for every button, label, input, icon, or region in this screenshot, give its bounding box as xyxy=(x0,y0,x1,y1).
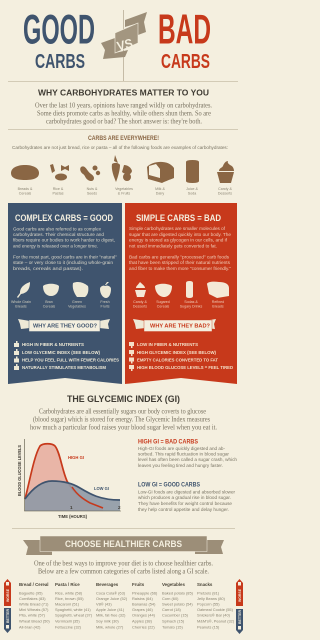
food icons row xyxy=(11,155,234,183)
icon: bowl xyxy=(43,284,59,296)
icon: candy cupcake xyxy=(135,282,146,297)
bad carbs bullets xyxy=(137,342,233,370)
complex carbs text: Good carbs are also referred to as complex xyxy=(13,226,102,232)
ribbon: why are they bad: WHY ARE THEY BAD? xyxy=(150,324,210,330)
table: snacks xyxy=(197,582,235,629)
table: fruits xyxy=(132,582,158,629)
panel: simple carbs xyxy=(125,203,237,384)
right scale: worse to better: WORSE xyxy=(238,588,242,602)
table: bread and cereal: Baguette (95) xyxy=(19,590,43,596)
title: good carbs: CARBS xyxy=(35,50,85,73)
glycemic index intro text: (blood sugar) which is stored for energy. The Glycemic Index measures xyxy=(33,416,210,424)
simple carbs text: energy is stored as glycogen in our cells, and if xyxy=(129,238,228,244)
table: bread and cereal: All-bran (42) xyxy=(19,624,41,629)
food icon labels: Juice & xyxy=(186,187,198,191)
heading: glycemic index: THE GLYCEMIC INDEX (GI) xyxy=(67,393,180,404)
title: bad carbs: CARBS xyxy=(161,50,210,73)
heading: carbs are everywhere: CARBS ARE EVERYWHERE! xyxy=(88,135,159,142)
simple carbs text: that have been stripped of their natural nutrients xyxy=(129,260,231,266)
x axis label: TIME (HOURS) xyxy=(58,514,87,519)
simple carbs text: sugar that are digested quickly into our body. The xyxy=(129,232,231,238)
table: beverages: Beverages xyxy=(96,582,119,587)
table: bread and cereal: Wheat Bread (50) xyxy=(19,618,50,623)
table: beverages: Apple Juice (41) xyxy=(96,607,125,612)
good food labels: Cereals xyxy=(43,304,55,308)
icons: thumbs down xyxy=(129,342,134,371)
icons: thumbs up xyxy=(14,341,19,370)
glycemic index intro text: Carbohydrates are all essentially sugars our body coverts to glucose xyxy=(39,408,206,416)
good carbs bullets: NATURALLY STIMULATES METABOLISM xyxy=(22,365,106,370)
simple carbs text xyxy=(129,226,231,272)
x axis ticks: 1 xyxy=(70,505,73,510)
table: snacks: Popcorn (55) xyxy=(197,601,220,606)
table: bread and cereal: White Bread (71) xyxy=(19,601,49,606)
icon: soda xyxy=(186,281,193,298)
title: good carbs: GOOD xyxy=(23,6,95,52)
bad food labels: Sugared xyxy=(156,300,170,304)
high GI text block: leaves you feeling tired and hungry faster. xyxy=(138,463,223,469)
table: snacks: Snacks xyxy=(197,582,213,587)
low GI text block: which produces a gradual rise in blood sugar. xyxy=(138,495,231,501)
heading: simple carbs: SIMPLE CARBS = BAD xyxy=(136,212,221,223)
food icon labels: Soda xyxy=(188,192,196,196)
table: pasta and rice: Pasta / Rice xyxy=(55,582,80,587)
low GI text block: They have benefits for weight control because xyxy=(138,501,232,507)
choose healthier intro text: One of the best ways to improve your diet is to choose healthier carbs. xyxy=(34,560,213,568)
high GI text block: HIGH GI = BAD CARBS xyxy=(138,438,199,446)
icon: apple xyxy=(100,282,111,298)
food icon labels: Milk & xyxy=(155,187,165,191)
good food labels: Vegetables xyxy=(68,304,86,308)
good food labels: Fresh xyxy=(100,300,110,304)
table: pasta and rice: Rice, brown (55) xyxy=(55,596,84,601)
ribbon: why are they good xyxy=(18,319,110,332)
low GI curve xyxy=(25,481,120,511)
good food labels xyxy=(11,300,110,308)
table: pasta and rice xyxy=(55,582,93,629)
low GI text block: Low-GI foods are digested and absorbed slower xyxy=(138,490,235,496)
ribbon: why are they good: WHY ARE THEY GOOD? xyxy=(33,324,97,330)
low GI text block: LOW GI = GOOD CARBS xyxy=(138,482,201,488)
intro text xyxy=(35,102,212,126)
table: pasta and rice: Vermicelli (35) xyxy=(55,618,80,623)
table: beverages: Milk, whole (27) xyxy=(96,624,124,629)
high GI label: HIGH GI xyxy=(68,455,84,460)
food icon labels: Breads & xyxy=(18,187,33,191)
table: pasta and rice: Spaghetti, wheat (37) xyxy=(55,613,93,618)
simple carbs text: not used immediately gets converted to fat. xyxy=(129,244,217,250)
low GI label: LOW GI xyxy=(94,486,109,491)
table: fruits: Fruits xyxy=(132,582,145,587)
good food labels: Fruits xyxy=(101,304,110,308)
table: vegetables: Sweet potato (54) xyxy=(162,601,193,606)
table: snacks: Peanuts (15) xyxy=(197,624,220,629)
simple carbs text: and fiber to make them more "consumer friendly." xyxy=(129,266,231,272)
table: snacks: M&M's®, Peanut (32) xyxy=(197,618,235,623)
food icon labels: Pastas xyxy=(52,192,64,196)
axes xyxy=(24,439,121,511)
bad food labels: Sugary Drinks xyxy=(180,304,202,308)
panel: complex carbs xyxy=(8,203,122,384)
table: vegetables: Spinach (15) xyxy=(162,618,185,623)
table: beverages: Soy milk (30) xyxy=(96,618,119,623)
table: bread and cereal: Cornflakes (83) xyxy=(19,596,46,601)
icon: leafy greens xyxy=(73,282,88,297)
simple carbs text: Bad carbs are generally "processed" carb foods xyxy=(129,254,230,260)
bad carbs bullets: HIGH BLOOD GLUCOSE LEVELS = FEEL TIRED xyxy=(137,365,233,370)
table: beverages: Coca Cola® (63) xyxy=(96,590,126,596)
good food icons xyxy=(17,282,111,298)
high GI text block: level has often been called a sugar crash, which xyxy=(138,457,237,463)
table: beverages: Milk, fat-free (32) xyxy=(96,613,126,618)
table: bread and cereal xyxy=(19,582,50,629)
food icon labels: Nuts & xyxy=(87,187,98,191)
good food labels: Bran xyxy=(45,300,53,304)
icon: pasta xyxy=(50,164,69,180)
low GI text block xyxy=(138,482,235,513)
bad carbs bullets: EMPTY CALORIES CONVERTED TO FAT xyxy=(137,357,218,362)
chart: blood glucose over time xyxy=(17,439,121,519)
good carbs bullets: HIGH IN FIBER & NUTRIENTS xyxy=(22,342,84,347)
bad food labels: Sodas & xyxy=(184,300,198,304)
x axis ticks xyxy=(70,505,121,510)
complex carbs text xyxy=(13,226,117,272)
table: pasta and rice: Spaghetti, white (41) xyxy=(55,607,91,612)
table: vegetables: Tomato (15) xyxy=(162,624,183,629)
table: bread and cereal: Pita, white (57) xyxy=(19,613,46,618)
intro text: Over the last 10 years, opinions have ranged wildly on carbohydrates. xyxy=(35,102,212,110)
glycemic index intro text xyxy=(30,408,217,432)
simple carbs text: Simple carbohydrates are smaller molecules of xyxy=(129,226,226,232)
bad food labels: Refined xyxy=(212,300,224,304)
bad food labels xyxy=(133,300,224,308)
table: snacks: Oatmeal Cookie (55) xyxy=(197,607,234,612)
bad food icons xyxy=(135,281,229,298)
table: pasta and rice: Fettuccine (32) xyxy=(55,624,82,629)
table: fruits: Pineapple (66) xyxy=(132,590,158,596)
table: snacks: Pretzels (81) xyxy=(197,590,220,596)
good carbs bullets: LOW GLYCEMIC INDEX (SEE BELOW) xyxy=(22,350,101,355)
title: bad carbs: BAD xyxy=(158,6,211,52)
complex carbs text: For the most part, good carbs are in their "natural" xyxy=(13,254,117,260)
bad food labels: Cereals xyxy=(157,304,169,308)
table: pasta and rice: Rice, white (58) xyxy=(55,590,83,596)
icon: cupcake xyxy=(217,161,234,183)
table: fruits: Oranges (44) xyxy=(132,613,156,618)
icon: nuts xyxy=(80,166,100,181)
food icon labels: Dairy xyxy=(156,192,164,196)
table: fruits: Apples (38) xyxy=(132,618,153,623)
table: vegetables: Corn (60) xyxy=(162,596,179,601)
table: bread and cereal: Mini Wheats (57) xyxy=(19,607,49,612)
icon: refined bread xyxy=(207,282,229,298)
good carbs bullets xyxy=(22,342,119,370)
x axis ticks: 2 xyxy=(118,505,121,510)
choose healthier intro text xyxy=(34,560,213,576)
table: vegetables: Baked potato (85) xyxy=(162,590,194,596)
high GI curve xyxy=(25,444,103,511)
table: bread and cereal: Bread / Cereal xyxy=(19,582,49,587)
right scale: worse to better: BETTER xyxy=(238,610,242,624)
food icon labels: Vegetables xyxy=(115,187,133,191)
left scale: worse to better: BETTER xyxy=(6,609,10,623)
complex carbs text: fibers require our bodies to work harder to digest, xyxy=(13,238,115,244)
table: vegetables: Carrot (18) xyxy=(162,607,182,612)
icon: wheat xyxy=(17,282,30,298)
high GI text block: High-GI foods are quickly digested and ab- xyxy=(138,446,225,452)
intro text: Some diets promote carbs as healthy, while others shun them. So are xyxy=(37,110,211,118)
table: snacks: Snickers® Bar (40) xyxy=(197,613,231,618)
high GI text block xyxy=(138,438,237,469)
table: pasta and rice: Macaroni (51) xyxy=(55,601,80,606)
complex carbs text: and energy is released over a longer time. xyxy=(13,244,98,250)
complex carbs text: state – or very close to it (including whole-grain xyxy=(13,260,113,266)
y axis label: BLOOD GLUCOSE LEVELS xyxy=(17,445,22,496)
food icon labels: Rice & xyxy=(53,187,64,191)
table: beverages: V8® (43) xyxy=(96,601,112,606)
bad food labels: Breads xyxy=(212,304,224,308)
left scale: worse to better xyxy=(4,579,11,633)
right scale: worse to better xyxy=(236,579,243,634)
table: fruits: Grapes (46) xyxy=(132,607,153,612)
icon: vegetables xyxy=(112,155,132,182)
table: beverages xyxy=(96,582,128,629)
carbs are everywhere text: Carbohydrates are not just bread, rice or pasta – all of the following foods are examples of carbohydrates: xyxy=(12,145,228,151)
bad food labels: Candy & xyxy=(133,300,147,304)
title: good carbs xyxy=(23,6,95,73)
table: fruits: Bananas (54) xyxy=(132,601,156,606)
food icon labels: Candy & xyxy=(218,187,232,191)
glycemic index intro text: how much a particular food raises your blood sugar level when you eat it. xyxy=(30,424,217,432)
high GI text block: sorbed. This rapid fluctuation in blood sugar xyxy=(138,452,229,458)
icon: bread xyxy=(11,165,39,180)
good food labels: Breads xyxy=(15,304,27,308)
food icon labels: Desserts xyxy=(218,192,232,196)
icon: cheese xyxy=(147,162,174,183)
vs ribbon: VS. xyxy=(115,35,137,54)
icon: juice xyxy=(186,160,199,183)
table: fruits: Raisins (64) xyxy=(132,596,153,601)
food icon labels xyxy=(18,187,232,196)
table: snacks: Jelly Beans (80) xyxy=(197,596,226,601)
table: beverages: Orange Juice (52) xyxy=(96,596,128,601)
table: vegetables: Cucumber (15) xyxy=(162,613,189,618)
table: vegetables xyxy=(162,582,194,629)
table: fruits: Cherries (22) xyxy=(132,624,155,629)
good food labels: Whole Grain xyxy=(11,300,31,304)
heading: why carbohydrates matter: WHY CARBOHYDRATES MATTER TO YOU xyxy=(38,88,209,98)
low GI text block: they help control appetite and delay hunger. xyxy=(138,507,229,513)
vs ribbon xyxy=(101,12,147,59)
icon: sugared cereal bowl xyxy=(155,284,172,297)
good food labels: Green xyxy=(72,300,82,304)
title: bad carbs xyxy=(158,6,211,73)
food icon labels: Cereals xyxy=(19,192,31,196)
complex carbs text: carbohydrates. Their chemical structure and xyxy=(13,232,104,238)
bad food labels: Desserts xyxy=(133,304,147,308)
table: vegetables: Vegetables xyxy=(162,582,185,587)
bad carbs bullets: HIGH GLYCEMIC INDEX (SEE BELOW) xyxy=(137,350,217,355)
food icon labels: & Fruits xyxy=(118,192,130,196)
heading: complex carbs: COMPLEX CARBS = GOOD xyxy=(15,212,113,223)
banner: choose healthier carbs xyxy=(23,536,224,555)
ribbon: why are they bad xyxy=(133,319,216,332)
good carbs bullets: HELP YOU FEEL FULL WITH FEWER CALORIES xyxy=(22,357,119,362)
choose healthier intro text: Below are a few common categories of carbs listed along a GI scale. xyxy=(38,568,209,576)
complex carbs text: breads, cereals and pastas). xyxy=(13,266,83,272)
left scale: worse to better: WORSE xyxy=(6,588,10,602)
banner: choose healthier carbs: CHOOSE HEALTHIER CARBS xyxy=(65,539,183,550)
bad carbs bullets: LOW IN FIBER & NUTRIENTS xyxy=(137,342,198,347)
intro text: carbohydrates good or bad? The short answer is: they're both. xyxy=(46,118,202,126)
food icon labels: Seeds xyxy=(87,192,97,196)
